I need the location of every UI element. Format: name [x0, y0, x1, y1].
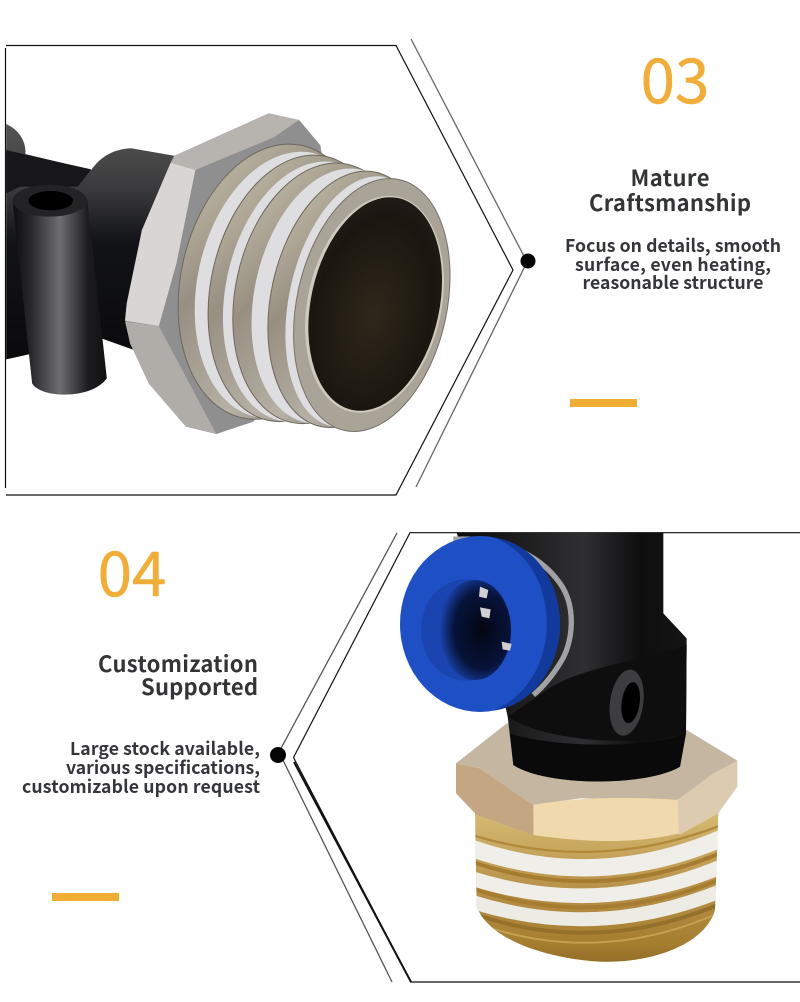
description: various specifications, [66, 755, 260, 780]
description [565, 233, 781, 295]
black elbow body [457, 533, 687, 781]
hexagon frame: inner black outline [6, 46, 513, 495]
connector dot [520, 254, 536, 268]
description: Focus on details, smooth [565, 233, 781, 258]
accent bar [570, 399, 637, 407]
description [22, 736, 261, 799]
number 03: 03 [641, 31, 709, 121]
heading: Mature Craftsmanship: Craftsmanship [589, 186, 751, 218]
hexagon frame: outer grey chevron [279, 533, 397, 982]
black elbow body [6, 124, 176, 359]
connector dot [270, 747, 286, 763]
description: customizable upon request [22, 774, 261, 799]
panel: section 04 product photo frame [270, 533, 800, 982]
heading: Mature Craftsmanship [589, 161, 751, 218]
description: reasonable structure [582, 270, 764, 295]
number 04: 04 [98, 524, 166, 614]
heading: Customization Supported: Supported [141, 670, 258, 702]
panel: section 03 product photo frame [6, 39, 536, 495]
heading: Mature Craftsmanship: Mature [630, 161, 710, 193]
text block: section 04 [22, 524, 261, 901]
illustration: nickel-plated threaded connector [6, 113, 472, 446]
side port [606, 667, 648, 738]
hexagon frame: outer grey chevron [411, 39, 527, 487]
hexagon frame: inner black outline [294, 533, 800, 982]
illustration: blue push-in elbow with brass thread [400, 533, 737, 967]
text block: section 03 [565, 31, 781, 407]
description: surface, even heating, [575, 252, 771, 277]
heading: Customization Supported: Customization [98, 647, 258, 679]
hex nut [125, 113, 338, 434]
silver retaining ring [453, 539, 571, 695]
description: Large stock available, [70, 736, 260, 761]
brass hex nut [456, 723, 737, 841]
heading: Customization Supported [98, 647, 258, 702]
accent bar [52, 893, 119, 901]
brass thread [475, 814, 718, 962]
blue release collar [400, 536, 560, 712]
thread rings [153, 127, 472, 446]
small black side tube [13, 185, 107, 395]
